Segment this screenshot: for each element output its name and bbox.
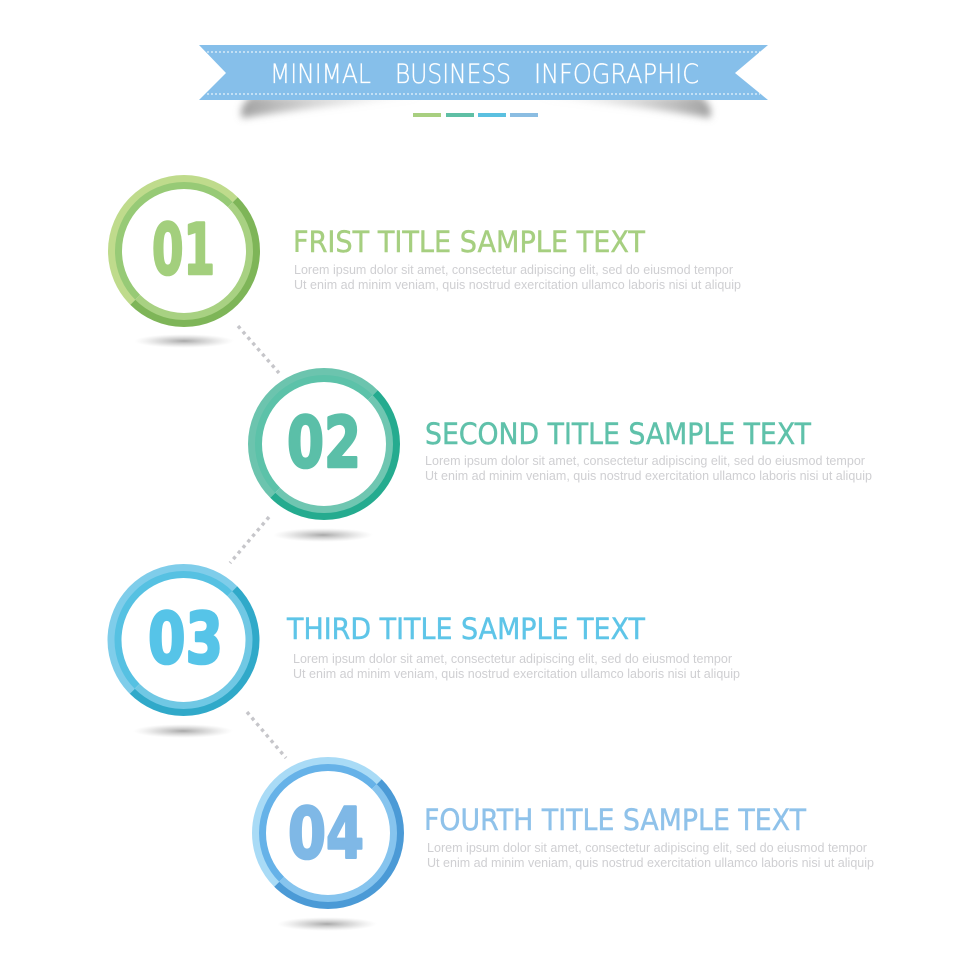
ribbon bbox=[199, 45, 768, 100]
colour key bars bbox=[413, 113, 538, 117]
number 03: 03 bbox=[148, 598, 223, 680]
step 03 bbox=[108, 564, 740, 738]
banner title: INFOGRAPHIC bbox=[534, 59, 699, 90]
number 04: 04 bbox=[288, 793, 364, 875]
shadow 01 bbox=[134, 334, 234, 348]
shadow 03 bbox=[133, 724, 233, 738]
body 01 bbox=[294, 262, 741, 292]
banner shadow right bbox=[530, 96, 711, 118]
body 04 bbox=[427, 840, 874, 870]
shadow 02 bbox=[273, 528, 373, 542]
body 04: Lorem ipsum dolor sit amet, consectetur adipiscing elit, sed do eiusmod tempor bbox=[427, 840, 868, 855]
banner title: MINIMAL bbox=[270, 59, 371, 90]
ring 01 bbox=[108, 175, 260, 327]
body 04: Ut enim ad minim veniam, quis nostrud exercitation ullamco laboris nisi ut aliquip bbox=[427, 855, 874, 870]
banner bbox=[199, 45, 768, 118]
ribbon stitching bbox=[207, 52, 760, 94]
ring 03 bbox=[108, 564, 260, 716]
connector 3 to 4 bbox=[247, 712, 286, 758]
step 02 bbox=[248, 368, 872, 542]
body 03 bbox=[293, 651, 740, 681]
body 02: Lorem ipsum dolor sit amet, consectetur adipiscing elit, sed do eiusmod tempor bbox=[425, 453, 866, 468]
banner title bbox=[270, 59, 699, 90]
body 01: Ut enim ad minim veniam, quis nostrud exercitation ullamco laboris nisi ut aliquip bbox=[294, 277, 741, 292]
title 03: THIRD TITLE SAMPLE TEXT bbox=[286, 612, 645, 646]
ring 04 bbox=[252, 757, 404, 909]
connector 1 to 2 bbox=[238, 326, 279, 373]
body 03: Ut enim ad minim veniam, quis nostrud exercitation ullamco laboris nisi ut aliquip bbox=[293, 666, 740, 681]
banner shadow left bbox=[241, 96, 430, 118]
banner title: BUSINESS bbox=[395, 59, 511, 90]
shadow 04 bbox=[277, 917, 377, 931]
body 02: Ut enim ad minim veniam, quis nostrud exercitation ullamco laboris nisi ut aliquip bbox=[425, 468, 872, 483]
step 01 bbox=[108, 175, 741, 348]
title 02: SECOND TITLE SAMPLE TEXT bbox=[425, 417, 811, 451]
title 01: FRIST TITLE SAMPLE TEXT bbox=[293, 225, 645, 259]
ring 02 bbox=[248, 368, 400, 520]
body 01: Lorem ipsum dolor sit amet, consectetur adipiscing elit, sed do eiusmod tempor bbox=[294, 262, 734, 277]
body 02 bbox=[425, 453, 872, 483]
number 01: 01 bbox=[152, 209, 215, 291]
connector 2 to 3 bbox=[230, 517, 269, 563]
number 02: 02 bbox=[287, 402, 361, 484]
body 03: Lorem ipsum dolor sit amet, consectetur adipiscing elit, sed do eiusmod tempor bbox=[293, 651, 733, 666]
title 04: FOURTH TITLE SAMPLE TEXT bbox=[424, 803, 806, 837]
step 04 bbox=[252, 757, 874, 931]
